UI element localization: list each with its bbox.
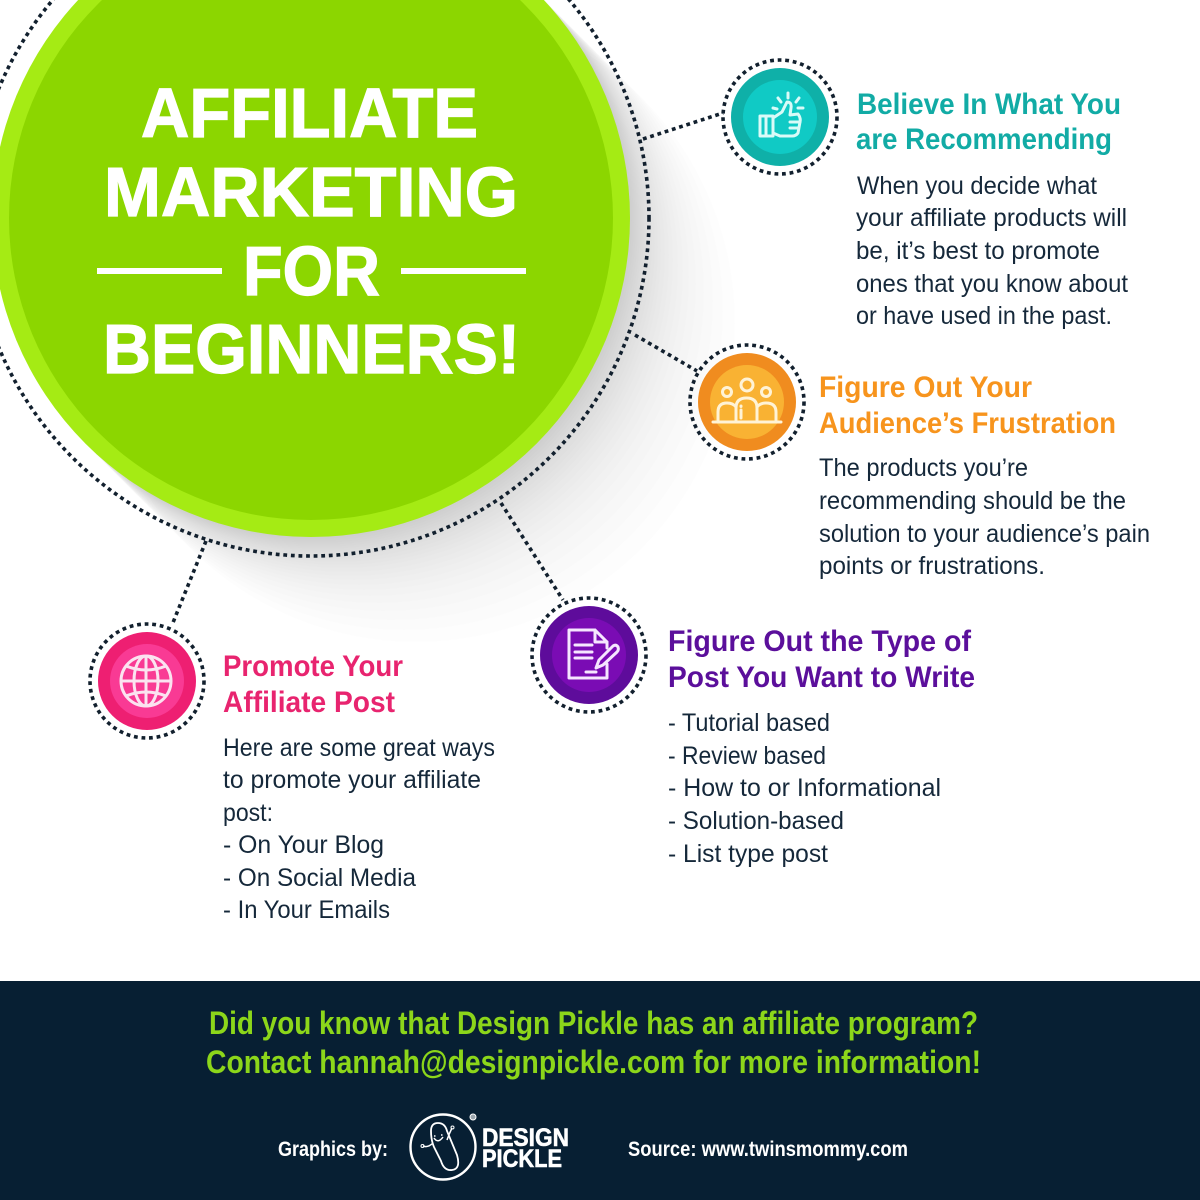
heading: are Recommending: [856, 123, 1112, 156]
title: [97, 74, 526, 388]
graphics credit: Graphics by:: [278, 1138, 388, 1161]
text block: [223, 734, 495, 924]
text block: - How to or Informational: [668, 774, 941, 802]
heading: [819, 371, 1116, 440]
title: FOR: [243, 232, 380, 310]
logo: design pickle: [410, 1114, 569, 1180]
panel: promote your affiliate post: [90, 624, 495, 924]
footer callout: Did you know that Design Pickle has an affiliate program?: [209, 1005, 978, 1041]
logo: design pickle: PICKLE: [482, 1145, 562, 1173]
text block: - List type post: [668, 840, 828, 868]
connector: hero to post type: [501, 503, 563, 600]
text block: [819, 454, 1150, 580]
text block: - Solution-based: [668, 807, 844, 835]
heading: Audience’s Frustration: [819, 407, 1116, 440]
text block: - Tutorial based: [668, 709, 830, 737]
icon: globe: [90, 624, 204, 738]
hero circle shadow: [0, 0, 735, 642]
title: MARKETING: [104, 153, 518, 231]
text block: The products you’re: [819, 454, 1028, 482]
text block: be, it’s best to promote: [856, 237, 1100, 265]
text block: - On Your Blog: [223, 831, 384, 859]
connector: hero to thumbs up: [643, 113, 723, 139]
footer callout: [206, 1005, 981, 1080]
text block: to promote your affiliate: [223, 766, 481, 794]
text block: points or frustrations.: [819, 552, 1045, 580]
text block: ones that you know about: [856, 270, 1128, 298]
icon: audience: [690, 345, 804, 459]
text block: - Review based: [668, 742, 826, 770]
panel: figure out your audience's frustration: [690, 345, 1150, 580]
text block: your affiliate products will: [856, 204, 1127, 232]
text block: - On Social Media: [223, 864, 416, 892]
heading: Affiliate Post: [223, 686, 395, 719]
heading: Post You Want to Write: [668, 661, 975, 694]
footer panel: [0, 981, 1200, 1200]
title: BEGINNERS!: [103, 310, 520, 388]
heading: Figure Out the Type of: [668, 625, 972, 658]
heading: [223, 650, 403, 719]
text block: or have used in the past.: [856, 302, 1112, 330]
panel: believe in what you are recommending: [723, 60, 1128, 330]
heading: Figure Out Your: [819, 371, 1032, 404]
text block: [856, 172, 1128, 330]
source credit: Source: www.twinsmommy.com: [628, 1138, 908, 1161]
panel: figure out the type of post: [532, 598, 975, 868]
logo: design pickle: DESIGN: [482, 1124, 569, 1152]
icon: document and pen: [532, 598, 646, 712]
text block: solution to your audience’s pain: [819, 520, 1150, 548]
text block: - In Your Emails: [223, 896, 390, 924]
dotted ring around hero circle: [0, 0, 649, 556]
title: AFFILIATE: [141, 74, 478, 152]
icon: thumbs up: [723, 60, 837, 174]
heading: Believe In What You: [857, 88, 1121, 121]
heading: [668, 625, 975, 694]
heading: Promote Your: [223, 650, 403, 683]
text block: [668, 709, 941, 868]
text block: post:: [223, 799, 273, 827]
text block: recommending should be the: [819, 487, 1126, 515]
connector: hero to promote: [172, 541, 206, 625]
connector: hero to audience: [635, 335, 697, 371]
hero circle: [0, 0, 630, 537]
text block: When you decide what: [857, 172, 1097, 200]
footer callout: Contact hannah@designpickle.com for more information!: [206, 1044, 981, 1080]
heading: [856, 88, 1121, 156]
text block: Here are some great ways: [223, 734, 495, 762]
